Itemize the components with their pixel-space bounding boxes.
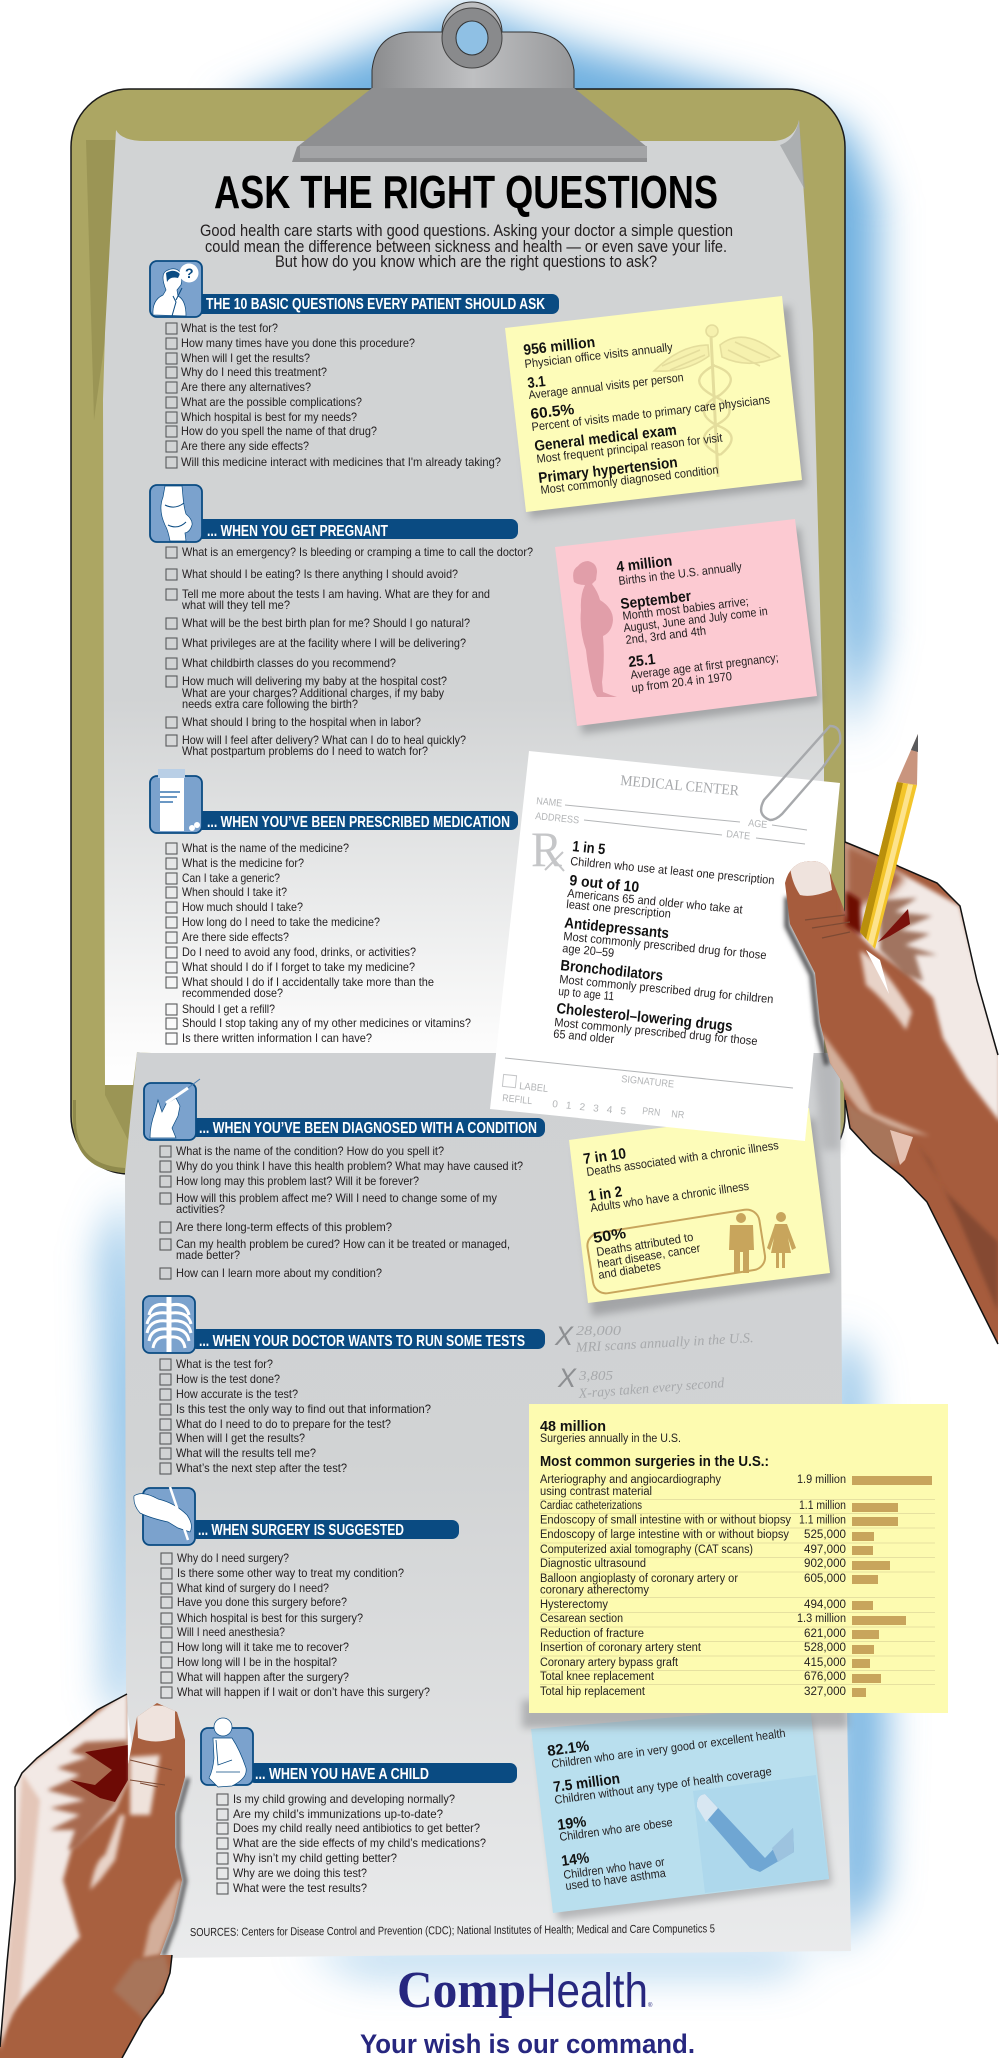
clip (292, 2, 647, 162)
checklist (166, 545, 533, 758)
intro text: could mean the difference between sickness and health — or even save your life. (205, 238, 727, 256)
checklist: Are there long-term effects of this problem? (176, 1220, 392, 1234)
bar chart: surgeries: 1.9 million (797, 1474, 846, 1486)
sticky note: physician stats: Average annual visits per person (528, 370, 684, 402)
prescription stats: Most commonly prescribed drug for those (563, 929, 767, 962)
left hand (0, 1690, 190, 2058)
bar chart: surgeries: 528,000 (804, 1642, 846, 1654)
logo: CompHealth (397, 1962, 653, 2019)
paper: upper sheet (103, 120, 824, 1085)
checklist: Should I get a refill? (182, 1002, 275, 1016)
icon: Rx symbol: R (531, 821, 563, 877)
checklist: Should I stop taking any of my other medicines or vitamins? (182, 1016, 471, 1030)
sticky note: chronic illness stats: 7 in 10 (582, 1145, 627, 1168)
bar chart: surgeries: 525,000 (804, 1529, 846, 1541)
checklist: Is there some other way to treat my condition? (177, 1566, 404, 1580)
checklist: Can my health problem be cured? How can it be treated or managed, (176, 1237, 510, 1251)
checklist: Are there any alternatives? (181, 380, 311, 394)
prescription stats: 1 in 5 (572, 838, 606, 858)
checklist (160, 1144, 523, 1280)
sticky note: chronic illness stats (569, 1108, 834, 1316)
sticky note: chronic illness stats: Adults who have a chronic illness (589, 1179, 750, 1215)
heading: most common surgeries: Most common surgeries in the U.S.: (540, 1453, 769, 1470)
checklist: What should I do if I forget to take my medicine? (182, 960, 415, 974)
checklist: Will I need anesthesia? (177, 1625, 285, 1639)
statistic: 48 million (540, 1418, 681, 1445)
handwritten notes: MRI scans annually in the U.S. (574, 1331, 754, 1356)
form header fields (535, 773, 807, 844)
bar chart: surgeries: 676,000 (804, 1671, 846, 1683)
bar chart: surgeries: 1.1 million (799, 1514, 846, 1526)
bar chart: surgeries: 494,000 (804, 1599, 846, 1611)
icon: doctor with question: ? (185, 265, 194, 281)
checklist: What will happen if I wait or don’t have this surgery? (177, 1685, 430, 1699)
handwritten notes: X (554, 1321, 574, 1351)
bar chart: surgeries: Insertion of coronary artery stent (540, 1642, 702, 1654)
checklist: What is the test for? (176, 1357, 273, 1371)
sticky note: children stats: 7.5 million (552, 1770, 621, 1796)
bar chart: surgeries: 1.1 million (799, 1500, 846, 1512)
heading bar (195, 811, 518, 831)
icon: doctor with question (150, 261, 202, 317)
bar chart: surgeries: 621,000 (804, 1628, 846, 1640)
bar chart: surgeries (540, 1474, 935, 1698)
bar chart: surgeries: Diagnostic ultrasound (540, 1558, 646, 1570)
sticky note: children stats (531, 1706, 832, 1920)
heading bar: ... WHEN YOU GET PREGNANT (207, 523, 388, 540)
prescription stats: Cholesterol–lowering drugs (556, 1000, 733, 1035)
checklist: How long will I be in the hospital? (177, 1655, 337, 1669)
sticky note: birth stats: Month most babies arrive; (622, 594, 749, 623)
prescription stats: Americans 65 and older who take at (567, 886, 744, 917)
sticky note: children stats: Children who have or (563, 1855, 666, 1882)
bar chart: surgeries: using contrast material (540, 1486, 652, 1498)
checklist: What kind of surgery do I need? (177, 1581, 329, 1595)
checklist: What are the possible complications? (181, 395, 362, 409)
bar chart: surgeries: Total knee replacement (540, 1671, 655, 1683)
sticky note: children stats: 14% (560, 1849, 590, 1870)
sticky note: children stats: Children who are in very good or excellent health (551, 1726, 786, 1771)
callout: 50 percent: Deaths attributed to (595, 1230, 695, 1259)
sticky note: chronic illness stats: Deaths associated with a chronic illness (585, 1138, 780, 1179)
prescription stats: Antidepressants (564, 915, 670, 942)
icon: ribcage x-ray (143, 1296, 195, 1353)
checklist: What do I need to do to prepare for the test? (176, 1417, 391, 1431)
heading bar: ... WHEN YOU HAVE A CHILD (255, 1766, 429, 1783)
icon: hand with scalpel (134, 1487, 195, 1545)
bar chart: surgeries: Reduction of fracture (540, 1628, 644, 1640)
bar chart: surgeries: 1.3 million (797, 1613, 846, 1625)
prescription stats: Bronchodilators (560, 957, 664, 985)
prescription stats: 65 and older (553, 1027, 615, 1046)
clipboard board (71, 89, 845, 1174)
checklist: Why isn’t my child getting better? (233, 1851, 397, 1865)
checklist: Why do you think I have this health problem? What may have caused it? (176, 1159, 523, 1173)
prescription stats (553, 838, 775, 1048)
sticky note: birth stats: Births in the U.S. annually (618, 559, 742, 588)
checklist: What should I do if I accidentally take more than the (182, 975, 434, 989)
checklist: activities? (176, 1202, 225, 1216)
logo: CompHealth: ® (648, 2002, 653, 2009)
sticky note: children stats: Children without any type of health coverage (554, 1764, 773, 1807)
logo: CompHealth: Comp (397, 1962, 526, 2019)
sticky note: physician stats: Percent of visits made to primary care physicians (531, 392, 771, 434)
checklist: Does my child really need antibiotics to get better? (233, 1821, 480, 1835)
paper: lower sheet (125, 1052, 851, 1958)
callout: 50 percent: and diabetes (597, 1258, 662, 1282)
right hand (780, 840, 1000, 1350)
bar chart: surgeries: Hysterectomy (540, 1599, 608, 1611)
intro text (200, 222, 733, 271)
checklist: Do I need to avoid any food, drinks, or activities? (182, 945, 416, 959)
sticky note: birth stats: 2nd, 3rd and 4th (625, 623, 707, 647)
handwritten notes: X (557, 1363, 577, 1393)
sticky note: birth stats: 25.1 (627, 651, 656, 671)
statistic: 48 million: 48 million (540, 1418, 606, 1435)
checklist: Are there any side effects? (181, 439, 309, 453)
prescription stats: least one prescription (566, 897, 672, 921)
panel: surgery is suggested (134, 1487, 459, 1699)
checklist: What are the side effects of my child’s medications? (233, 1836, 486, 1850)
panel: diagnosed with a condition (144, 1079, 545, 1280)
checklist: What will happen after the surgery? (177, 1670, 349, 1684)
checklist: How will I feel after delivery? What can I do to heal quickly? (182, 733, 466, 747)
bar chart: surgeries: Computerized axial tomography (CAT scans) (540, 1544, 753, 1556)
checklist: What are your charges? Additional charges, if my baby (182, 686, 444, 700)
bar chart: surgeries: coronary atherectomy (540, 1584, 649, 1596)
checklist: needs extra care following the birth? (182, 697, 358, 711)
checklist: Why are we doing this test? (233, 1866, 367, 1880)
prescription stats: age 20–59 (562, 941, 615, 960)
checklist: What childbirth classes do you recommend? (182, 656, 396, 670)
checklist: Is there written information I can have? (182, 1031, 372, 1045)
sticky note: physician stats: Most frequent principal reason for visit (536, 431, 724, 466)
prescription stats: Children who use at least one prescription (570, 854, 775, 887)
checklist: What is the medicine for? (182, 856, 304, 870)
sticky note: children stats: Children who are obese (559, 1815, 674, 1844)
checklist: What is the test for? (181, 321, 278, 335)
sticky note: physician stats: Physician office visits annually (524, 340, 673, 371)
icon: pregnant silhouette (573, 561, 617, 697)
checklist: Can I take a generic? (182, 871, 280, 885)
bar chart: surgeries: Cardiac catheterizations (540, 1500, 642, 1512)
bar chart: surgeries: Cesarean section (540, 1613, 623, 1625)
heading bar: ... WHEN YOUR DOCTOR WANTS TO RUN SOME TESTS (199, 1333, 525, 1350)
heading bar (195, 519, 518, 540)
checklist: What privileges are at the facility where I will be delivering? (182, 636, 466, 650)
panel: when you get pregnant (150, 485, 533, 758)
heading bar: THE 10 BASIC QUESTIONS EVERY PATIENT SHOULD ASK (206, 296, 545, 313)
sticky note: birth stats: Average age at first pregnancy; (630, 650, 779, 682)
panel: when you have a child (201, 1718, 517, 1895)
checklist: How will this problem affect me? Will I need to change some of my (176, 1191, 497, 1205)
heading bar: ... WHEN SURGERY IS SUGGESTED (198, 1522, 404, 1539)
checklist: What should I be eating? Is there anything I should avoid? (182, 567, 458, 581)
prescription form (490, 751, 840, 1141)
checklist: Is this test the only way to find out that information? (176, 1402, 431, 1416)
bar chart: surgeries: 902,000 (804, 1558, 846, 1570)
checklist: Which hospital is best for this surgery? (177, 1611, 363, 1625)
checklist: How long may this problem last? Will it be forever? (176, 1174, 419, 1188)
icon: pill bottle (150, 769, 202, 833)
checklist: Which hospital is best for my needs? (181, 410, 357, 424)
checklist (160, 1357, 431, 1475)
sticky note: birth stats: up from 20.4 in 1970 (631, 669, 733, 695)
bar chart: surgeries: 605,000 (804, 1573, 846, 1585)
title: ASK THE RIGHT QUESTIONS (214, 166, 718, 218)
logo: CompHealth: Health (526, 1965, 648, 2018)
form footer fields (502, 1058, 793, 1121)
checklist: How long do I need to take the medicine? (182, 915, 380, 929)
checklist (161, 1551, 430, 1699)
form header fields: DATE (726, 829, 751, 842)
handwritten notes: 3,805 (578, 1369, 613, 1384)
checklist: Will this medicine interact with medicines that I'm already taking? (181, 455, 501, 469)
checklist: When will I get the results? (181, 351, 310, 365)
sticky note: children stats: used to have asthma (565, 1866, 667, 1893)
checklist: When will I get the results? (176, 1431, 305, 1445)
icon: pencil (860, 734, 918, 949)
form header fields: ADDRESS (535, 811, 580, 827)
checklist: Are there side effects? (182, 930, 289, 944)
panel: surgery statistics (522, 1404, 948, 1728)
sticky note: physician stats (505, 296, 806, 518)
checklist: Is my child growing and developing normally? (233, 1792, 455, 1806)
sticky note: physician stats: Most commonly diagnosed condition (540, 462, 719, 497)
bar chart: surgeries: 327,000 (804, 1686, 846, 1698)
checklist: What will the results tell me? (176, 1446, 316, 1460)
form footer fields: PRN (642, 1106, 661, 1119)
statistic: 48 million: Surgeries annually in the U.S. (540, 1433, 681, 1445)
intro text: But how do you know which are the right questions to ask? (275, 253, 657, 271)
checklist (217, 1792, 486, 1895)
checklist: How is the test done? (176, 1372, 280, 1386)
icon: man and woman figures (729, 1212, 796, 1273)
bar chart: surgeries: Coronary artery bypass graft (540, 1657, 679, 1669)
checklist: What should I bring to the hospital when in labor? (182, 715, 421, 729)
handwritten notes (554, 1321, 754, 1402)
bar chart: surgeries: Endoscopy of large intestine with or without biopsy (540, 1529, 789, 1541)
sticky note: physician stats: 3.1 (527, 373, 546, 392)
bar chart: surgeries: Balloon angioplasty of coronary artery or (540, 1573, 738, 1585)
handwritten notes: 28,000 (576, 1324, 621, 1339)
intro text: Good health care starts with good questions. Asking your doctor a simple question (200, 222, 733, 240)
form footer fields: SIGNATURE (621, 1074, 675, 1090)
sticky note: children stats: 19% (556, 1813, 587, 1834)
sticky note: birth stats (555, 519, 821, 734)
sticky note: physician stats: Primary hypertension (538, 454, 679, 487)
sticky note: physician stats: 60.5% (530, 401, 575, 423)
heading bar (195, 294, 559, 314)
form footer fields: REFILL (502, 1093, 533, 1107)
checklist: How many times have you done this procedure? (181, 336, 415, 350)
heading bar (190, 1329, 545, 1350)
prescription stats: Most commonly prescribed drug for children (559, 972, 774, 1006)
checklist: Are my child’s immunizations up-to-date? (233, 1807, 443, 1821)
prescription stats: up to age 11 (558, 984, 615, 1003)
sticky note: chronic illness stats: 1 in 2 (587, 1183, 623, 1205)
checklist: recommended dose? (182, 986, 283, 1000)
checklist: How much will delivering my baby at the hospital cost? (182, 674, 447, 688)
panel: prescribed medication (150, 769, 518, 1045)
heading bar: ... WHEN YOU’VE BEEN DIAGNOSED WITH A CONDITION (199, 1120, 537, 1137)
checklist: Tell me more about the tests I am having. What are they for and (182, 587, 490, 601)
checklist: What were the test results? (233, 1881, 367, 1895)
checklist: What’s the next step after the test? (176, 1461, 347, 1475)
bar chart: surgeries: 415,000 (804, 1657, 846, 1669)
heading bar (248, 1763, 517, 1783)
checklist: Why do I need this treatment? (181, 365, 327, 379)
panel: doctor wants to run tests (143, 1296, 545, 1475)
icon: inhaler (693, 1775, 829, 1893)
checklist: How accurate is the test? (176, 1387, 298, 1401)
callout: 50 percent (586, 1208, 767, 1295)
checklist: What will be the best birth plan for me? Should I go natural? (182, 616, 470, 630)
callout: 50 percent: 50% (592, 1225, 627, 1247)
checklist: How much should I take? (182, 900, 303, 914)
sticky note: birth stats: September (619, 588, 692, 613)
checklist: Why do I need surgery? (177, 1551, 289, 1565)
checklist (166, 321, 501, 469)
callout: 50 percent: heart disease, cancer (596, 1241, 701, 1271)
bar chart: surgeries: Endoscopy of small intestine with or without biopsy (540, 1514, 791, 1526)
bar chart: surgeries: Total hip replacement (540, 1686, 646, 1698)
icon: sitting child (201, 1718, 253, 1787)
sticky note: physician stats: General medical exam (534, 422, 678, 455)
prescription stats: 9 out of 10 (569, 872, 640, 896)
checklist: What is the name of the medicine? (182, 841, 349, 855)
form header fields: MEDICAL CENTER (620, 773, 740, 799)
form footer fields: NR (671, 1109, 685, 1121)
icon: caduceus (654, 325, 780, 477)
sticky note: children stats: 82.1% (546, 1738, 590, 1760)
handwritten notes: X-rays taken every second (577, 1376, 726, 1402)
checklist: Have you done this surgery before? (177, 1595, 347, 1609)
icon: pregnant woman (150, 485, 202, 542)
form header fields: AGE (748, 818, 768, 831)
sources: SOURCES: Centers for Disease Control and Prevention (CDC); National Institutes of Health; Medical and Care Compunetics 5 (190, 1923, 715, 1939)
panel: 10 basic questions (150, 261, 559, 469)
form footer fields: 0 1 2 3 4 5 (552, 1099, 627, 1118)
bar chart: surgeries: Arteriography and angiocardiography (540, 1474, 721, 1486)
form footer fields: LABEL (519, 1081, 549, 1095)
icon: paperclip (761, 726, 840, 820)
prescription stats: Most commonly prescribed drug for those (554, 1015, 758, 1048)
heading bar: ... WHEN YOU’VE BEEN PRESCRIBED MEDICATION (207, 814, 510, 831)
checklist: what will they tell me? (181, 598, 290, 612)
background blue glow (100, 10, 885, 1975)
checklist: How do you spell the name of that drug? (181, 424, 377, 438)
checklist: When should I take it? (182, 885, 287, 899)
checklist: What is the name of the condition? How do you spell it? (176, 1144, 444, 1158)
sticky note: birth stats: 4 million (615, 552, 673, 576)
form header fields: NAME (536, 796, 563, 810)
sticky note: physician stats: 956 million (523, 334, 596, 359)
checklist: What postpartum problems do I need to watch for? (182, 744, 428, 758)
checklist (166, 841, 471, 1045)
sticky note: birth stats: August, June and July come in (623, 604, 768, 635)
checklist: How can I learn more about my condition? (176, 1266, 382, 1280)
checklist: What is an emergency? Is bleeding or cramping a time to call the doctor? (182, 545, 533, 559)
bar chart: surgeries: 497,000 (804, 1544, 846, 1556)
icon: hand with syringe (144, 1079, 200, 1140)
checklist: How long will it take me to recover? (177, 1640, 349, 1654)
checklist: made better? (176, 1248, 240, 1262)
